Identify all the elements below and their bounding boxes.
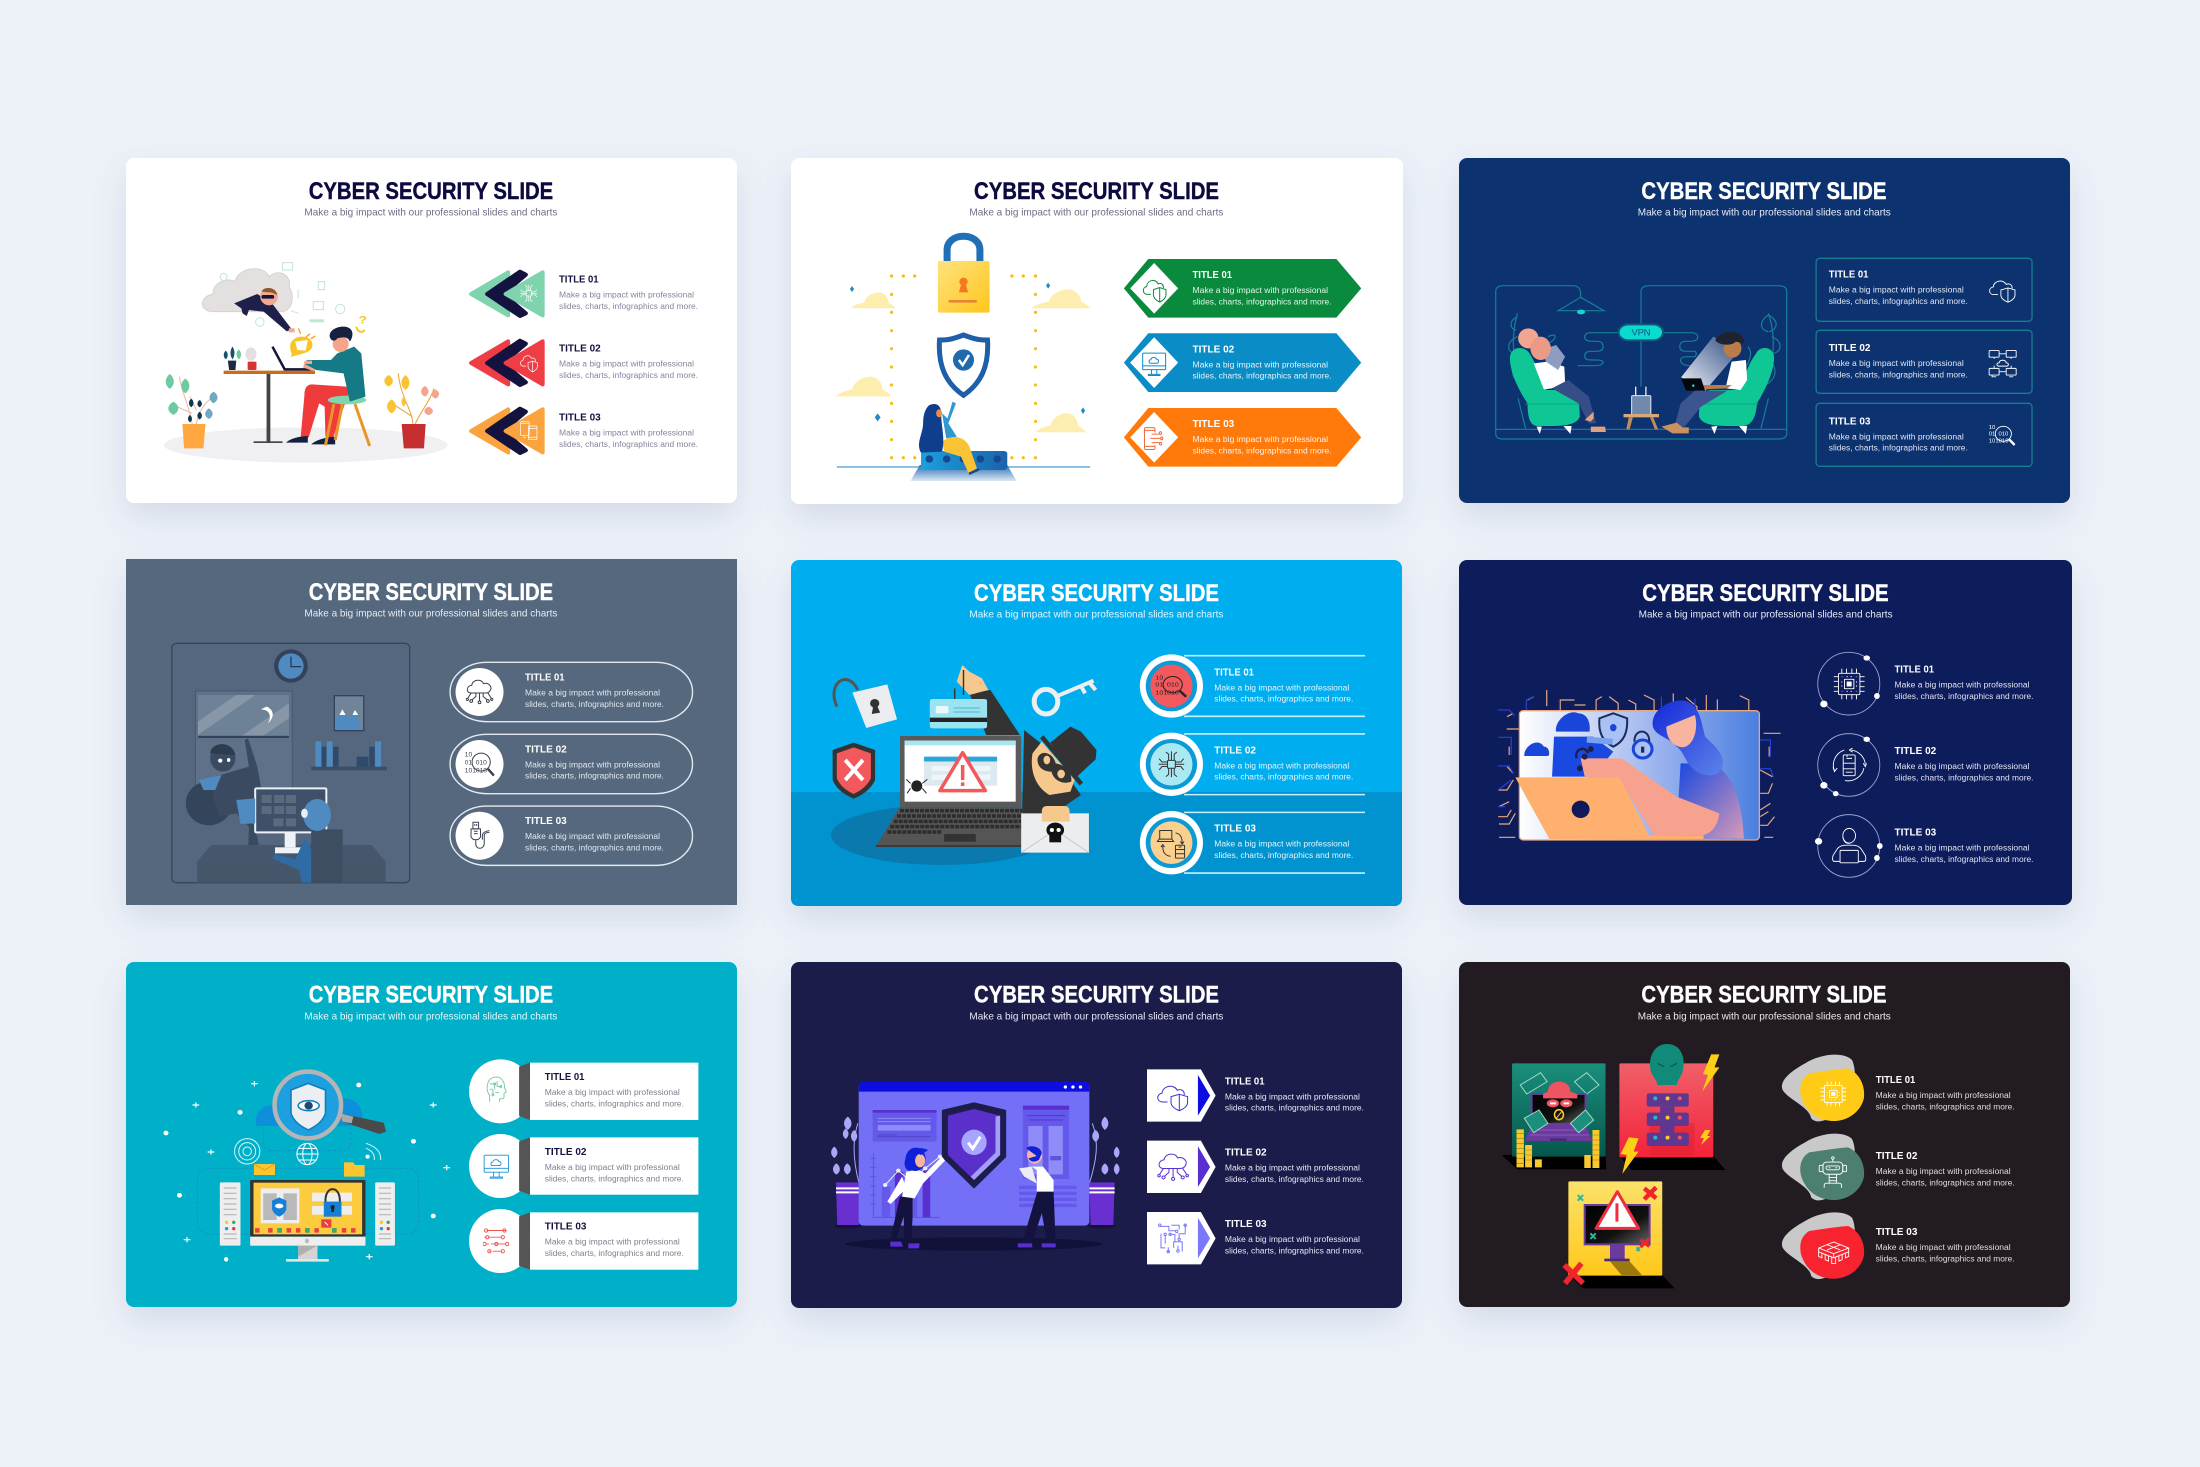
item 2: white tab with monitor icon (469, 1134, 698, 1198)
item 3: orange hexagon banner: slides, charts, infographics and more. (1192, 446, 1332, 455)
panel 2 subtitle: Make a big impact with our professional slides and charts (969, 206, 1223, 218)
item 2: tag with cloud network icon: Make a big impact with professional (1225, 1164, 1360, 1173)
panel 8: indigo slide with browser window and shield (791, 962, 1402, 1308)
item 1: outlined card: TITLE 01 (1829, 269, 1869, 281)
item 3: sand circle and rules (1140, 811, 1365, 874)
item 2: outlined card: TITLE 02 (1829, 342, 1871, 354)
panel 2 background (791, 158, 1403, 504)
panel 2 heading: CYBER SECURITY SLIDE (974, 178, 1219, 205)
item 3: sand circle and rules: slides, charts, infographics and more. (1214, 851, 1353, 860)
item 3: orange hexagon banner (1124, 408, 1361, 467)
item 1: pill with cloud icon (450, 662, 692, 722)
item 2: tag with cloud network icon: slides, charts, infographics and more. (1225, 1175, 1364, 1184)
illustration: woman with laptop and circuit traces (1498, 690, 1781, 840)
illustration: hacker, laptop warning, lock, key and shield (831, 665, 1097, 865)
item 3: pill with usb icon: Make a big impact with professional (525, 832, 660, 841)
item 2: red chevron with cloud shield icon: Make a big impact with professional (559, 360, 694, 369)
panel 4 background (126, 559, 737, 905)
item 1: coral circle and rules (1140, 654, 1365, 718)
panel 3 heading: CYBER SECURITY SLIDE (1641, 178, 1886, 205)
item 1: tag with cloud shield icon: TITLE 01 (1225, 1075, 1265, 1087)
item 3: red blob with 3D chip icon: slides, charts, infographics and more. (1876, 1254, 2015, 1263)
item 2: green blob with robot icon: Make a big impact with professional (1876, 1167, 2011, 1176)
item 3: outlined card (1816, 403, 2032, 466)
item 2: blue hexagon banner: TITLE 02 (1192, 343, 1234, 355)
item 1: yellow blob with chip icon (1782, 1055, 2015, 1121)
item 3: orange chevron with devices icon: Make a big impact with professional (559, 429, 694, 438)
item 2: white tab with monitor icon: slides, charts, infographics and more. (545, 1174, 684, 1183)
item 1: coral circle and rules: TITLE 01 (1214, 666, 1254, 678)
item 1: green hexagon banner: TITLE 01 (1192, 269, 1232, 281)
item 3: white tab with circuit nodes icon: Make a big impact with professional (545, 1238, 680, 1247)
item 2: blue hexagon banner: slides, charts, infographics and more. (1192, 372, 1332, 381)
item 3: tag with circuit board icon (1147, 1212, 1364, 1264)
panel 5: bright blue slide with hacker illustration (791, 560, 1402, 906)
item 1: outlined card: Make a big impact with professional (1829, 286, 1964, 295)
item 3: sand circle and rules: TITLE 03 (1214, 823, 1256, 835)
item 3: orange chevron with devices icon: TITLE 03 (559, 411, 601, 423)
item 2: white tab with monitor icon: TITLE 02 (545, 1146, 587, 1158)
item 1: tag with cloud shield icon: slides, charts, infographics and more. (1225, 1104, 1364, 1113)
panel 9 subtitle: Make a big impact with our professional slides and charts (1638, 1010, 1891, 1022)
item 3: orbit support agent icon: slides, charts, infographics and more. (1894, 855, 2034, 864)
item 1: orbit chip icon: TITLE 01 (1894, 664, 1934, 676)
panel 2: white slide with padlock illustration (791, 158, 1403, 504)
item 3: orange chevron with devices icon: slides, charts, infographics and more. (559, 440, 698, 449)
item 1: pill with cloud icon: Make a big impact with professional (525, 689, 660, 698)
illustration: ransomware, server and warning cards (1502, 1044, 1726, 1288)
item 2: orbit refresh icon: TITLE 02 (1894, 745, 1936, 757)
item 1: tag with cloud shield icon (1147, 1069, 1364, 1122)
panel 5 subtitle: Make a big impact with our professional slides and charts (969, 608, 1223, 620)
item 1: outlined card: slides, charts, infographics and more. (1829, 297, 1968, 306)
item 1: yellow blob with chip icon: TITLE 01 (1876, 1074, 1915, 1086)
item 3: pill with usb icon: slides, charts, infographics and more. (525, 843, 664, 852)
panel 5 background (791, 560, 1402, 906)
panel 6 subtitle: Make a big impact with our professional slides and charts (1639, 608, 1893, 620)
item 2: orbit refresh icon (1818, 734, 2034, 796)
illustration: phishing hacker and office worker: ? (358, 313, 367, 326)
item 2: green blob with robot icon: TITLE 02 (1876, 1150, 1918, 1162)
item 1: green chevron with burst icon (471, 272, 698, 316)
item 2: red chevron with cloud shield icon: TITLE 02 (559, 342, 601, 354)
item 2: aqua circle and rules: slides, charts, infographics and more. (1214, 773, 1353, 782)
panel 1 background (126, 158, 737, 503)
panel 6: deep navy slide with woman at laptop (1459, 560, 2072, 905)
item 2: tag with cloud network icon: TITLE 02 (1225, 1147, 1267, 1159)
item 3: orbit support agent icon: TITLE 03 (1894, 827, 1936, 839)
item 3: red blob with 3D chip icon: TITLE 03 (1876, 1226, 1918, 1238)
panel 4 heading: CYBER SECURITY SLIDE (309, 579, 553, 606)
panel 7 background (126, 962, 737, 1307)
item 2: white tab with monitor icon: Make a big impact with professional (545, 1163, 680, 1172)
item 2: orbit refresh icon: Make a big impact with professional (1894, 762, 2030, 771)
panel 9 background (1459, 962, 2070, 1307)
item 1: orbit chip icon (1818, 652, 2034, 715)
item 3: orange hexagon banner: TITLE 03 (1192, 418, 1234, 430)
item 2: outlined card (1816, 330, 2032, 393)
item 1: orbit chip icon: Make a big impact with professional (1894, 681, 2030, 690)
item 2: tag with cloud network icon (1147, 1141, 1364, 1193)
panel 8 heading: CYBER SECURITY SLIDE (974, 982, 1219, 1009)
panel 5 lower band (791, 792, 1402, 906)
item 1: green chevron with burst icon: TITLE 01 (559, 273, 599, 285)
item 3: tag with circuit board icon: Make a big impact with professional (1225, 1235, 1360, 1244)
item 2: aqua circle and rules: Make a big impact with professional (1214, 761, 1350, 770)
item 1: yellow blob with chip icon: slides, charts, infographics and more. (1876, 1102, 2015, 1111)
illustration: magnifier over shield and desktop computer (163, 1072, 450, 1262)
item 2: red chevron with cloud shield icon: slides, charts, infographics and more. (559, 371, 698, 380)
VPN label: VPN (1632, 328, 1651, 339)
panel 1: white slide with phishing illustration (126, 158, 737, 503)
item 3: tag with circuit board icon: TITLE 03 (1225, 1218, 1267, 1230)
item 2: blue hexagon banner (1124, 333, 1361, 392)
item 3: white tab with circuit nodes icon: TITLE 03 (545, 1221, 587, 1233)
panel 6 background (1459, 560, 2072, 905)
item 3: tag with circuit board icon: slides, charts, infographics and more. (1225, 1246, 1364, 1255)
item 2: pill with binary search icon: slides, charts, infographics and more. (525, 772, 664, 781)
item 1: green hexagon banner (1124, 259, 1361, 318)
item 1: green hexagon banner: Make a big impact with professional (1192, 286, 1328, 295)
panel 3 subtitle: Make a big impact with our professional slides and charts (1638, 206, 1891, 218)
illustration: two people analysing a security dashboard (831, 1082, 1120, 1251)
panel 4: slate slide with thief illustration (126, 559, 737, 905)
illustration: two people in armchairs connected through VPN (1496, 286, 1787, 439)
item 2: outlined card: slides, charts, infographics and more. (1829, 370, 1968, 379)
item 3: white tab with circuit nodes icon (469, 1209, 698, 1273)
panel 1 subtitle: Make a big impact with our professional slides and charts (304, 206, 557, 218)
item 1: pill with cloud icon: slides, charts, infographics and more. (525, 700, 664, 709)
item 1: pill with cloud icon: TITLE 01 (525, 672, 565, 684)
panel 7 heading: CYBER SECURITY SLIDE (309, 982, 553, 1009)
item 2: pill with binary search icon: Make a big impact with professional (525, 760, 660, 769)
item 2: green blob with robot icon (1782, 1134, 2015, 1200)
item 3: outlined card: slides, charts, infographics and more. (1829, 444, 1968, 453)
panel 9: charcoal slide with malware cards (1459, 962, 2070, 1307)
panel 1 heading: CYBER SECURITY SLIDE (309, 178, 553, 205)
item 3: pill with usb icon: TITLE 03 (525, 815, 567, 827)
item 1: white tab with head icon: slides, charts, infographics and more. (545, 1099, 684, 1108)
item 3: orbit support agent icon: Make a big impact with professional (1894, 844, 2030, 853)
item 3: red blob with 3D chip icon: Make a big impact with professional (1876, 1243, 2011, 1252)
panel 3: navy slide with VPN illustration (1459, 158, 2070, 503)
item 1: green chevron with burst icon: slides, charts, infographics and more. (559, 302, 698, 311)
item 3: orbit support agent icon (1815, 815, 2034, 877)
item 1: yellow blob with chip icon: Make a big impact with professional (1876, 1091, 2011, 1100)
item 2: aqua circle and rules (1140, 733, 1365, 796)
item 1: tag with cloud shield icon: Make a big impact with professional (1225, 1092, 1360, 1101)
panel 6 heading: CYBER SECURITY SLIDE (1642, 580, 1889, 607)
item 3: white tab with circuit nodes icon: slides, charts, infographics and more. (545, 1249, 684, 1258)
item 2: orbit refresh icon: slides, charts, infographics and more. (1894, 773, 2034, 782)
item 3: sand circle and rules: Make a big impact with professional (1214, 840, 1350, 849)
item 2: pill with binary search icon (450, 734, 692, 794)
item 3: red blob with 3D chip icon (1782, 1212, 2015, 1279)
item 2: blue hexagon banner: Make a big impact with professional (1192, 360, 1328, 369)
item 1: white tab with head icon (469, 1059, 698, 1123)
item 1: green chevron with burst icon: Make a big impact with professional (559, 291, 694, 300)
panel 8 subtitle: Make a big impact with our professional slides and charts (969, 1010, 1223, 1022)
item 1: orbit chip icon: slides, charts, infographics and more. (1894, 692, 2034, 701)
panel 9 heading: CYBER SECURITY SLIDE (1641, 982, 1886, 1009)
item 1: green hexagon banner: slides, charts, infographics and more. (1192, 297, 1332, 306)
panel 8 background (791, 962, 1402, 1308)
item 2: green blob with robot icon: slides, charts, infographics and more. (1876, 1178, 2015, 1187)
item 2: pill with binary search icon: TITLE 02 (525, 743, 567, 755)
panel 3 background (1459, 158, 2070, 503)
item 3: outlined card: TITLE 03 (1829, 415, 1871, 427)
item 1: white tab with head icon: Make a big impact with professional (545, 1088, 680, 1097)
item 3: outlined card: Make a big impact with professional (1829, 432, 1964, 441)
item 1: coral circle and rules: slides, charts, infographics and more. (1214, 695, 1353, 704)
panel 7 subtitle: Make a big impact with our professional slides and charts (304, 1010, 557, 1022)
item 2: outlined card: Make a big impact with professional (1829, 359, 1964, 368)
item 1: outlined card (1816, 258, 2032, 321)
illustration: phishing hacker and office worker (164, 263, 448, 463)
item 2: aqua circle and rules: TITLE 02 (1214, 744, 1256, 756)
panel 4 subtitle: Make a big impact with our professional slides and charts (304, 608, 557, 620)
item 1: white tab with head icon: TITLE 01 (545, 1071, 585, 1083)
item 3: pill with usb icon (450, 806, 692, 865)
item 3: orange hexagon banner: Make a big impact with professional (1192, 435, 1328, 444)
item 1: coral circle and rules: Make a big impact with professional (1214, 683, 1350, 692)
item 3: orange chevron with devices icon (471, 409, 698, 453)
illustration: padlock, shield and seated woman (836, 236, 1091, 481)
illustration: thief stealing from computer user at night (172, 643, 410, 883)
panel 7: teal slide with magnifier and desktop (126, 962, 737, 1307)
item 2: red chevron with cloud shield icon (471, 341, 698, 385)
panel 5 heading: CYBER SECURITY SLIDE (974, 580, 1219, 607)
